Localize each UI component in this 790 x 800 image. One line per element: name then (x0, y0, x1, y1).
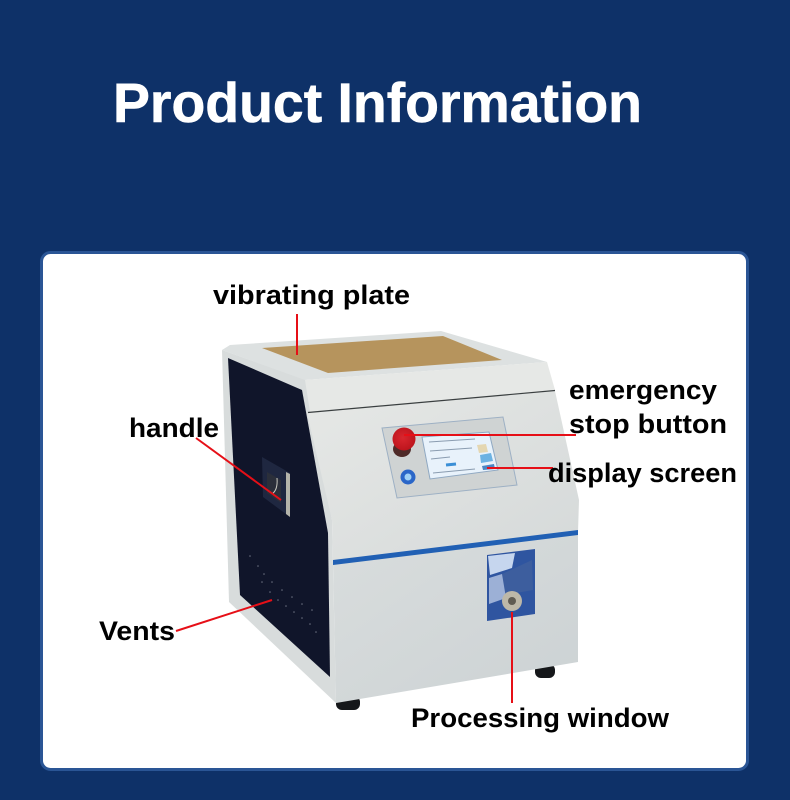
handle (262, 457, 290, 517)
top surface (222, 331, 547, 380)
label: emergency stop button: emergency (569, 375, 717, 405)
blue stripe (333, 530, 578, 565)
panel: product photo card (42, 252, 748, 770)
title: Product Information (113, 71, 642, 134)
label: processing window: Processing window (411, 703, 670, 733)
power button (400, 470, 416, 484)
top front band (305, 362, 555, 412)
callout lines (176, 314, 576, 703)
processing window (487, 549, 535, 621)
label: emergency stop button: stop button (569, 409, 727, 439)
label: vents: Vents (99, 616, 175, 646)
machine feet (336, 664, 555, 710)
vibrating plate (262, 336, 502, 373)
label: handle: handle (129, 413, 219, 443)
control plate (382, 417, 517, 498)
machine illustration (222, 331, 579, 710)
display screen (422, 432, 498, 479)
vents (249, 555, 317, 633)
lower front panel (333, 532, 578, 703)
label: vibrating plate: vibrating plate (213, 280, 410, 310)
emergency stop button (392, 428, 416, 457)
label: emergency stop button (569, 375, 727, 439)
side frame (222, 350, 336, 703)
side dark panel (228, 358, 330, 677)
label: display screen: display screen (548, 458, 737, 488)
front panel (307, 391, 579, 562)
lid seam (308, 390, 555, 412)
